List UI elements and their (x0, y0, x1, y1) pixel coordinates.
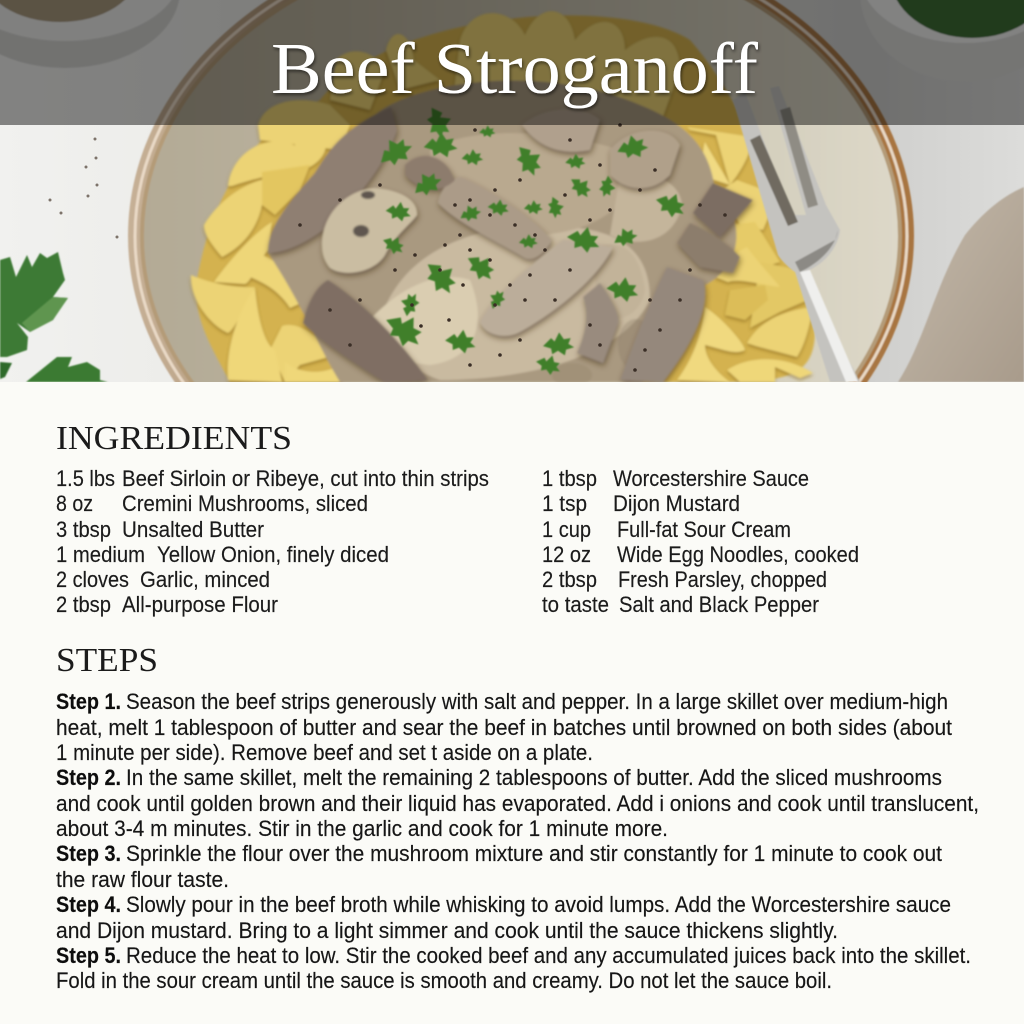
step 3: Sprinkle the flour over the mushroom mixture and stir constantly for 1 minute to cook out (126, 841, 942, 866)
ingredients list: right column: Full-fat Sour Cream (617, 517, 791, 542)
ingredients list: left column: 2 tbsp (56, 592, 111, 617)
step 2 (56, 765, 979, 841)
step 3: the raw flour taste. (56, 867, 229, 892)
mushroom slices (322, 188, 417, 273)
creamy sauce (268, 81, 736, 387)
ingredients list: right column: 2 tbsp (542, 567, 597, 592)
linen napkin (898, 187, 1024, 382)
step 2: and cook until golden brown and their liquid has evaporated. Add i onions and cook until translucent, (56, 791, 979, 816)
step 5 (56, 943, 971, 993)
ingredients list: right column: 1 tsp (542, 491, 587, 516)
ingredients list: left column: Yellow Onion, finely diced (157, 542, 389, 567)
parsley on top (373, 103, 690, 378)
step 3: Step 3. (56, 841, 121, 866)
marble table surface (0, 0, 1024, 382)
beef strips (268, 107, 753, 382)
ingredients list: left column: 8 oz (56, 491, 93, 516)
ingredients list: left column: Garlic, minced (140, 567, 270, 592)
ingredients list: left column: 3 tbsp (56, 517, 111, 542)
dark title band (0, 0, 1024, 125)
ingredients list: right column (542, 466, 859, 617)
ingredients list: left column (56, 466, 489, 617)
ingredients list: left column: 2 cloves (56, 567, 129, 592)
step 5: Reduce the heat to low. Stir the cooked beef and any accumulated juices back into the skillet. (126, 943, 971, 968)
ingredients list: right column: to taste (542, 592, 609, 617)
step 4 (56, 892, 951, 943)
ingredients list: right column: 12 oz (542, 542, 591, 567)
step 5: Step 5. (56, 943, 121, 968)
title: Beef Stroganoff (271, 28, 759, 109)
step 2: In the same skillet, melt the remaining 2 tablespoons of butter. Add the sliced mushrooms (126, 765, 942, 790)
step 2: about 3-4 m minutes. Stir in the garlic and cook for 1 minute more. (56, 816, 668, 841)
steps text (56, 689, 979, 993)
step 4: and Dijon mustard. Bring to a light simmer and cook until the sauce thickens slightly. (56, 918, 838, 943)
ingredients list: left column: Unsalted Butter (122, 517, 264, 542)
step 1: 1 minute per side). Remove beef and set t aside on a plate. (56, 740, 593, 765)
heading: steps: STEPS (56, 642, 158, 679)
ingredients list: left column: 1.5 lbs (56, 466, 115, 491)
parsley garnish on table (0, 252, 108, 382)
step 5: Fold in the sour cream until the sauce is smooth and creamy. Do not let the sauce boil. (56, 968, 832, 993)
small bowl of herbs (867, 0, 1024, 43)
step 1: Step 1. (56, 689, 121, 714)
small bowl of pepper (0, 0, 180, 68)
ingredients list: right column: Fresh Parsley, chopped (618, 567, 827, 592)
stoneware bowl (127, 0, 915, 382)
step 1 (56, 689, 952, 765)
step 1: Season the beef strips generously with salt and pepper. In a large skillet over medium-high (126, 689, 948, 714)
fork (733, 86, 860, 382)
ingredients list: right column: 1 tbsp (542, 466, 597, 491)
ingredients list: right column: Dijon Mustard (613, 491, 740, 516)
step 2: Step 2. (56, 765, 121, 790)
ingredients list: right column: 1 cup (542, 517, 591, 542)
ingredients list: left column: All-purpose Flour (122, 592, 278, 617)
egg noodles (191, 11, 815, 382)
heading: ingredients: INGREDIENTS (56, 420, 292, 457)
stroganoff food (191, 11, 815, 387)
ingredients list: right column: Wide Egg Noodles, cooked (617, 542, 859, 567)
step 4: Step 4. (56, 892, 121, 917)
step 3 (56, 841, 942, 892)
ingredients list: left column: Beef Sirloin or Ribeye, cut into thin strips (122, 466, 489, 491)
pepper specks on table (50, 139, 117, 237)
ingredients list: right column: Salt and Black Pepper (619, 592, 819, 617)
hero photo: beef stroganoff bowl (0, 0, 1024, 382)
ingredients list: left column: Cremini Mushrooms, sliced (122, 491, 368, 516)
ingredients list: left column: 1 medium (56, 542, 145, 567)
step 1: heat, melt 1 tablespoon of butter and sear the beef in batches until browned on both sides (about (56, 715, 952, 740)
ingredients list: right column: Worcestershire Sauce (613, 466, 809, 491)
step 4: Slowly pour in the beef broth while whisking to avoid lumps. Add the Worcestershire sauce (126, 892, 951, 917)
black pepper specks (300, 125, 725, 370)
